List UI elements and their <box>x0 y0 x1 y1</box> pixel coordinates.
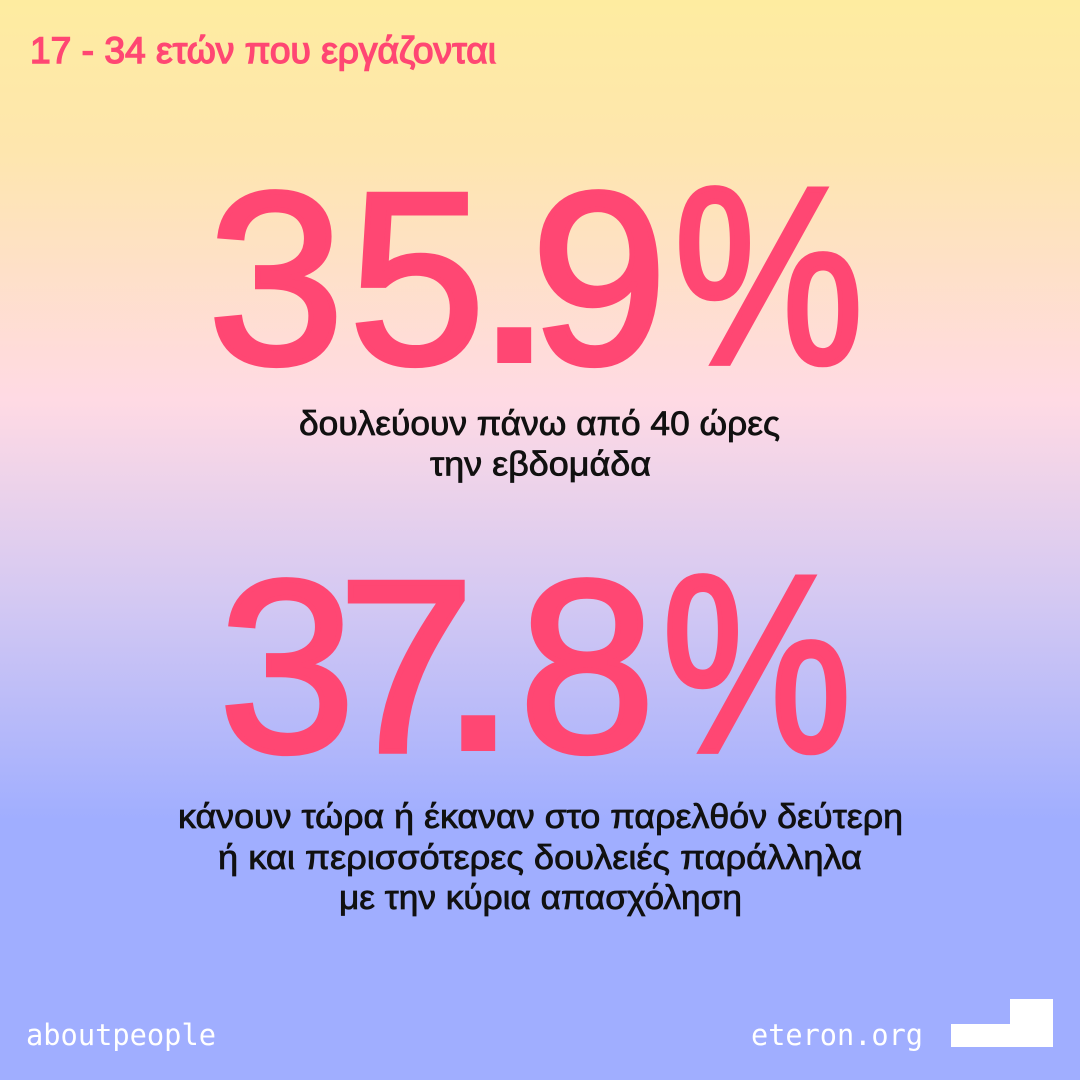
statistic: 35.9%: . <box>481 146 548 414</box>
caption: first statistic: την εβδομάδα <box>430 446 651 484</box>
brand: aboutpeople: aboutpeople <box>26 1018 216 1052</box>
heading: 17 - 34 ετών που εργάζονται <box>30 30 496 71</box>
statistic: 35.9%: 9 <box>531 141 667 415</box>
caption: first statistic: δουλεύουν πάνω από 40 ώρες <box>299 405 780 443</box>
caption: second statistic: με την κύρια απασχόληση <box>339 879 742 917</box>
statistic: 37.8%: . <box>445 534 512 802</box>
brand: eteron.org: eteron.org <box>751 1018 923 1052</box>
statistic: 37.8% <box>219 524 852 805</box>
statistic: 37.8%: 7 <box>338 529 474 803</box>
statistic: 35.9%: 3 <box>208 141 344 415</box>
caption: first statistic <box>299 405 780 484</box>
caption: second statistic: κάνουν τώρα ή έκαναν στο παρελθόν δεύτερη <box>178 798 903 836</box>
statistic: 37.8%: % <box>662 524 852 805</box>
statistic: 35.9% <box>208 136 864 417</box>
logo: stepped white block <box>951 999 1053 1047</box>
caption: second statistic: ή και περισσότερες δουλειές παράλληλα <box>218 839 862 877</box>
caption: second statistic <box>178 798 903 917</box>
statistic: 37.8%: 8 <box>519 529 655 803</box>
statistic: 35.9%: % <box>674 136 864 417</box>
statistic: 37.8%: 3 <box>219 529 355 803</box>
statistic: 35.9%: 5 <box>349 141 485 415</box>
